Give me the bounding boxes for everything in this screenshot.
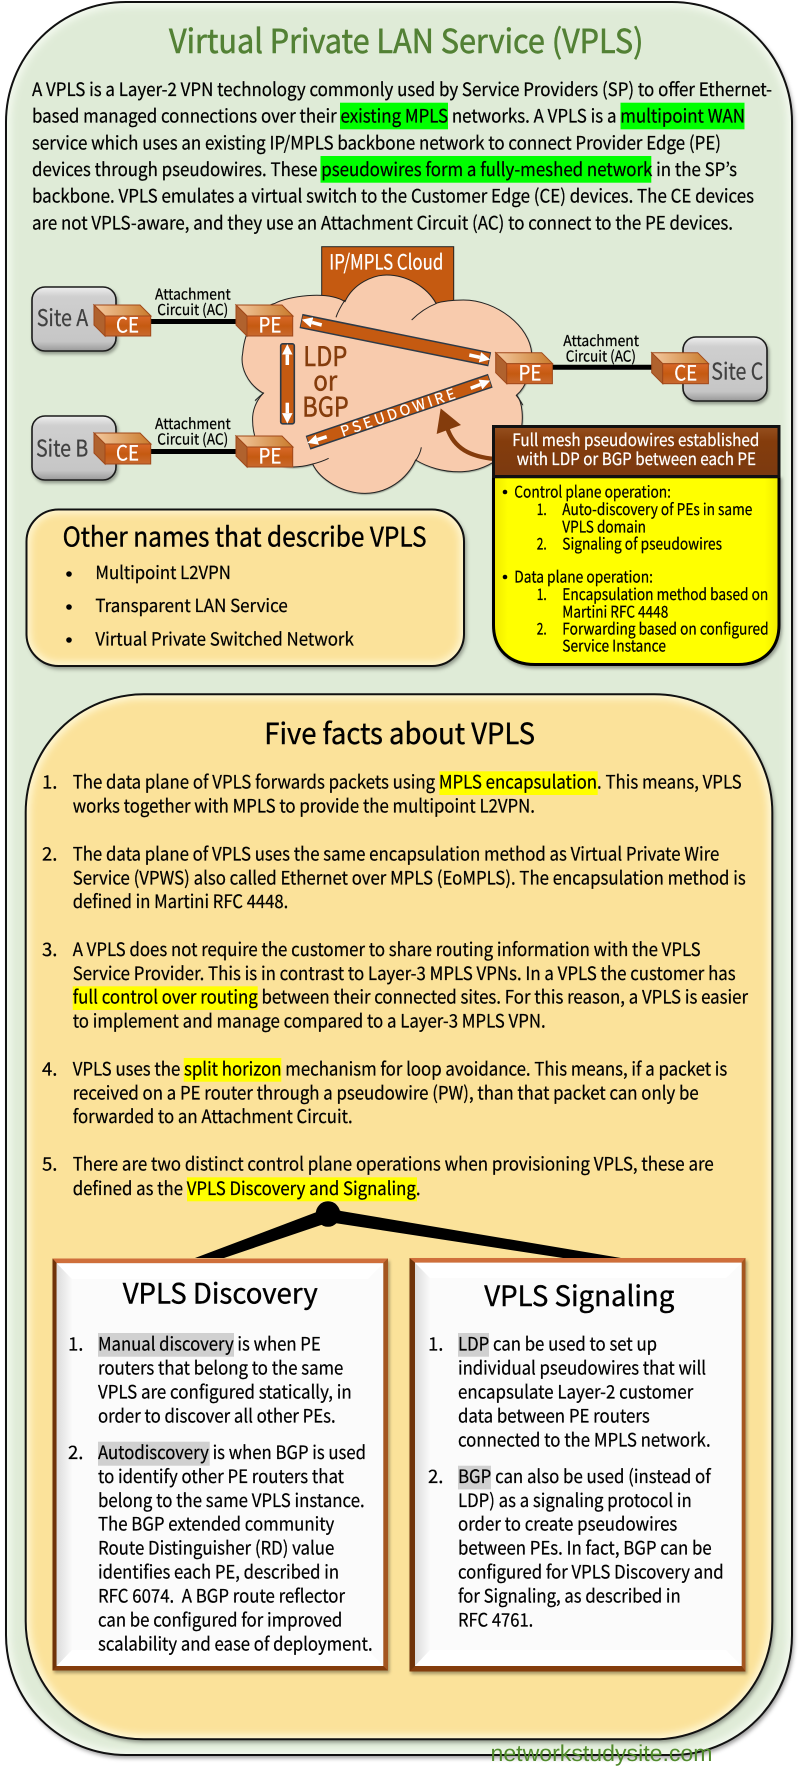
site A (32, 287, 116, 351)
connector: tree to two boxes (195, 1201, 621, 1258)
callout body: yellow: 2. (537, 530, 547, 554)
site A: Site A (37, 299, 88, 333)
arrow: vertical down (286, 403, 289, 413)
fact 1: works together with MPLS to provide the multipoint L2VPN. (73, 793, 535, 819)
list: VPLS discovery: can be configured for improved (98, 1606, 342, 1632)
LDP or BGP label: LDP (303, 335, 347, 374)
title: Virtual Private LAN Service (VPLS) (169, 15, 644, 63)
arrow: top bar left (312, 322, 322, 325)
list: VPLS discovery: 2. (68, 1439, 83, 1465)
fact 4: VPLS uses the split horizon mechanism for loop avoidance. This means, if a packet is (73, 1055, 727, 1081)
panel: VPLS signaling (410, 1258, 746, 1672)
LDP or BGP label: or (313, 360, 338, 399)
list: VPLS discovery: to identify other PE routers that (98, 1463, 344, 1489)
arrow: vertical up (286, 355, 289, 365)
device: CE site B (94, 433, 151, 468)
device: PE site A (236, 305, 293, 340)
fact 5 (42, 1151, 714, 1201)
fact 5: defined as the VPLS Discovery and Signaling. (73, 1175, 420, 1201)
attachment circuit labels: Circuit (AC) (157, 299, 228, 320)
LDP or BGP label (302, 335, 349, 425)
list: other names: Transparent LAN Service (95, 592, 288, 618)
list: VPLS discovery: VPLS are configured statically, in (98, 1378, 352, 1404)
callout body: yellow: Martini RFC 4448 (562, 598, 668, 622)
list: VPLS discovery: scalability and ease of deployment. (98, 1630, 373, 1656)
curved arrow to pseudowire (437, 408, 495, 459)
list: VPLS signaling: BGP can also be used (instead of (458, 1463, 712, 1489)
list: VPLS signaling: 2. (428, 1463, 443, 1489)
list: VPLS signaling: connected to the MPLS network. (458, 1426, 711, 1452)
list: VPLS discovery: belong to the same VPLS instance. (98, 1487, 365, 1513)
pseudowire: bottom bar (308, 381, 490, 443)
callout body: yellow: Encapsulation method based on (562, 581, 768, 605)
callout body: yellow: 1. (537, 581, 547, 605)
attachment circuit labels (155, 283, 639, 450)
list: VPLS discovery: The BGP extended community (98, 1511, 335, 1537)
callout body: yellow: VPLS domain (562, 513, 646, 537)
attachment circuit labels: Attachment (155, 413, 231, 434)
fact 3: Service Provider. This is in contrast to Layer-3 MPLS VPNs. In a VPLS the customer has (73, 960, 736, 986)
list: VPLS discovery: routers that belong to the same (98, 1355, 343, 1381)
callout body: yellow: Control plane operation: (514, 479, 671, 503)
device: CE site A (94, 305, 151, 340)
fact 1: The data plane of VPLS forwards packets using MPLS encapsulation. This means, VPLS (73, 769, 742, 795)
attachment circuit links (148, 322, 655, 452)
site C: Site C (711, 352, 763, 386)
site B (32, 416, 116, 480)
fact 4: forwarded to an Attachment Circuit. (73, 1103, 353, 1129)
fact 4: received on a PE router through a pseudowire (PW), than that packet can only be (73, 1079, 699, 1105)
attachment circuit labels: Attachment (563, 330, 639, 351)
callout body: yellow: Data plane operation: (514, 563, 653, 587)
callout body: yellow: Service Instance (562, 633, 666, 657)
list: VPLS signaling: data between PE routers (458, 1402, 650, 1428)
callout body: yellow: 1. (537, 496, 547, 520)
list: VPLS discovery: order to discover all other PEs. (98, 1402, 336, 1428)
list: VPLS signaling: for Signaling, as described in (458, 1582, 681, 1608)
fact 1 (42, 769, 742, 819)
device: PE site C: PE (519, 357, 542, 387)
list: VPLS discovery: identifies each PE, described in (98, 1559, 339, 1585)
list: VPLS discovery (68, 1331, 373, 1656)
device: CE site C: CE (674, 357, 697, 387)
list: other names: Virtual Private Switched Network (95, 626, 354, 652)
fact 3: to implement and manage compared to a Layer-3 MPLS VPN. (73, 1008, 546, 1034)
list: VPLS discovery: 1. (68, 1331, 83, 1357)
arrow: bottom bar left (317, 437, 327, 440)
intro paragraph: backbone. VPLS emulates a virtual switch to the Customer Edge (CE) devices. The CE devices (32, 183, 754, 209)
intro paragraph: devices through pseudowires. These pseudowires form a fully-meshed network in the SP’s (32, 156, 737, 182)
device: CE site A: CE (116, 310, 139, 340)
fact 2: The data plane of VPLS uses the same encapsulation method as Virtual Private Wire (73, 840, 719, 866)
arrow: bottom bar right (471, 384, 480, 388)
list: VPLS signaling: RFC 4761. (458, 1606, 533, 1632)
heading: five facts: Five facts about VPLS (264, 711, 535, 753)
fact 5: There are two distinct control plane operations when provisioning VPLS, these are (73, 1151, 714, 1177)
fact 3 (42, 936, 749, 1034)
heading: VPLS signaling: VPLS Signaling (484, 1275, 674, 1315)
list: VPLS discovery: Manual discovery is when PE (98, 1331, 321, 1357)
intro paragraph: are not VPLS-aware, and they use an Attachment Circuit (AC) to connect to the PE devices. (32, 209, 733, 235)
device: CE site C (652, 353, 709, 387)
callout: full mesh pseudowires (494, 426, 779, 664)
device: PE site B: PE (258, 441, 282, 471)
arrow: top bar right (469, 355, 480, 357)
callout header: brown (494, 426, 779, 476)
list: other names: Multipoint L2VPN (95, 559, 231, 585)
list: VPLS signaling: individual pseudowires that will (458, 1355, 706, 1381)
callout body: yellow: 2. (537, 616, 547, 640)
list: VPLS signaling: order to create pseudowires (458, 1511, 677, 1537)
list: other names (66, 559, 354, 652)
site C (683, 337, 767, 401)
fact 2: 2. (42, 840, 57, 866)
device: CE site B: CE (116, 438, 139, 468)
fact 5: 5. (42, 1151, 57, 1177)
device: PE site A: PE (258, 310, 282, 340)
label box: IP/MPLS Cloud: IP/MPLS Cloud (329, 246, 443, 276)
list: VPLS signaling: LDP can be used to set up (458, 1331, 657, 1357)
panel: VPLS discovery (52, 1258, 388, 1670)
fact 3: A VPLS does not require the customer to share routing information with the VPLS (73, 936, 701, 962)
list: VPLS discovery: Route Distinguisher (RD) value (98, 1535, 334, 1561)
label box: IP/MPLS Cloud (322, 246, 454, 317)
callout body: yellow: Auto-discovery of PEs in same (562, 496, 752, 520)
attachment circuit labels: Circuit (AC) (566, 346, 636, 367)
panel: five facts (26, 694, 772, 1739)
callout body: yellow: Signaling of pseudowires (562, 530, 722, 554)
fact 3: full control over routing between their connected sites. For this reason, a VPLS is easier (73, 984, 749, 1010)
list: VPLS discovery: Autodiscovery is when BGP is used (98, 1439, 366, 1465)
diagram: cloud (242, 275, 532, 493)
pseudowire: top bar (301, 321, 490, 359)
callout body: yellow (494, 477, 779, 664)
callout header: brown: Full mesh pseudowires established (512, 426, 759, 451)
callout body: yellow: Forwarding based on configured (562, 616, 769, 640)
device: PE site C (496, 353, 553, 387)
callout header: brown: with LDP or BGP between each PE (517, 445, 756, 470)
intro paragraph (32, 76, 772, 235)
watermark: networkstudysite.com (490, 1740, 712, 1766)
fact 1: 1. (42, 769, 57, 795)
list: VPLS signaling: LDP) as a signaling protocol in (458, 1487, 692, 1513)
fact 2 (42, 840, 746, 914)
attachment circuit labels: Circuit (AC) (157, 429, 228, 450)
list: VPLS signaling: configured for VPLS Discovery and (458, 1559, 724, 1585)
list: VPLS signaling: 1. (428, 1331, 443, 1357)
intro paragraph: service which uses an existing IP/MPLS backbone network to connect Provider Edge (PE) (32, 129, 721, 155)
panel: other names (26, 510, 464, 666)
list: VPLS signaling: between PEs. In fact, BGP can be (458, 1535, 712, 1561)
pseudowire: vertical bar (281, 344, 294, 424)
heading: other names: Other names that describe VPLS (63, 516, 427, 555)
fact 2: defined in Martini RFC 4448. (73, 888, 288, 914)
fact 4 (42, 1055, 727, 1129)
list: VPLS signaling: encapsulate Layer-2 customer (458, 1378, 694, 1404)
list: VPLS signaling (428, 1331, 724, 1632)
fact 2: Service (VPWS) also called Ethernet over MPLS (EoMPLS). The encapsulation method is (73, 864, 746, 890)
fact 4: 4. (42, 1055, 57, 1081)
list: VPLS discovery: RFC 6074. A BGP route reflector (98, 1582, 346, 1608)
device: PE site B (236, 436, 293, 471)
pseudowire label: PSEUDOWIRE (338, 383, 458, 441)
site B: Site B (36, 430, 88, 464)
LDP or BGP label: BGP (302, 386, 349, 425)
intro paragraph: based managed connections over their existing MPLS networks. A VPLS is a multipoint WAN (32, 103, 745, 129)
attachment circuit labels: Attachment (155, 283, 231, 304)
heading: VPLS discovery: VPLS Discovery (123, 1272, 318, 1312)
fact 3: 3. (42, 936, 57, 962)
